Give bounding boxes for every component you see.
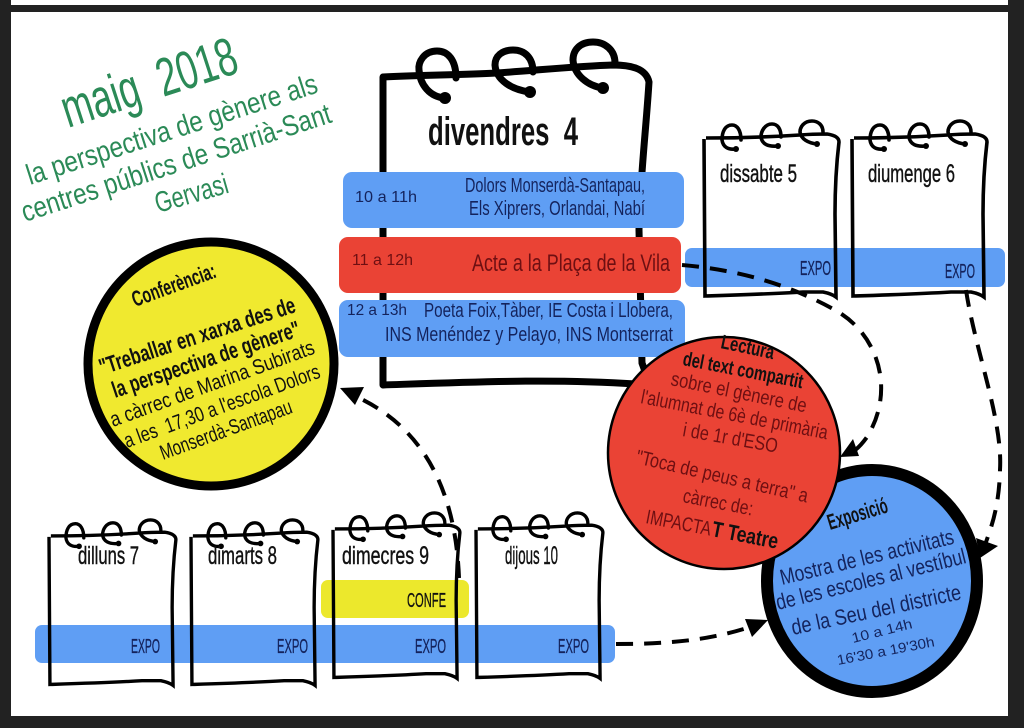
- opening hours: 10 a 14h: [850, 615, 914, 646]
- label: dilluns 7: dilluns 7: [78, 542, 139, 570]
- heading: Lectura del text compartit: [681, 331, 805, 393]
- panel: lectura circle: [608, 331, 840, 569]
- label: EXPO: EXPO: [800, 258, 831, 280]
- conference title: "Treballar en xarxa des de: [96, 292, 299, 380]
- title: maig 2018: maig 2018: [53, 26, 245, 139]
- heading: divendres 4: divendres 4: [428, 110, 578, 154]
- panel: conference circle: [88, 242, 334, 486]
- schedule row 12 a 13h: INS Menéndez y Pelayo, INS Montserrat: [385, 324, 673, 346]
- label: dijous 10: dijous 10: [505, 542, 558, 570]
- label: CONFE: CONFE: [407, 590, 446, 612]
- play credit: T Teatre: [710, 516, 781, 554]
- heading: Lectura del text compartit: Lectura: [719, 331, 777, 364]
- conference details: a les 17,30 a l'escola Dolors: [121, 360, 323, 453]
- conference bar: [321, 580, 469, 618]
- opening hours: 16'30 a 19'30h: [836, 633, 936, 668]
- schedule row 10 a 11h: Dolors Monserdà-Santapau,: [465, 175, 645, 197]
- play credit: "Toca de peus a terra" a: [634, 446, 811, 508]
- label: EXPO: EXPO: [945, 261, 975, 283]
- conference title: [96, 292, 303, 403]
- schedule row 12 a 13h: [339, 300, 685, 357]
- heading: Conferència: Conferència:: [128, 258, 219, 312]
- label: dimecres 9: dimecres 9: [342, 542, 429, 570]
- exposició description: de la Seu del districte: [789, 579, 963, 640]
- schedule row 11 a 12h: 11 a 12h: [352, 252, 413, 269]
- label: EXPO: EXPO: [558, 636, 589, 658]
- subtitle line 2: centres públics de Sarrià-Sant: [17, 98, 335, 229]
- schedule row 12 a 13h: 12 a 13h: [347, 302, 407, 319]
- panel: exposició circle: [767, 470, 977, 692]
- conference details: a càrrec de Marina Subirats: [107, 336, 318, 432]
- lectura description: l'alumnat de 6è de primària: [639, 386, 830, 444]
- schedule row 10 a 11h: [343, 172, 684, 228]
- notebook: dimarts 8: [191, 520, 318, 685]
- title block: [17, 26, 335, 229]
- panel: divendres 4 notebook: [383, 42, 650, 385]
- heading: Exposició: Exposició: [824, 493, 891, 535]
- label: EXPO: EXPO: [131, 636, 160, 658]
- notebook: dimecres 9: [333, 513, 460, 678]
- play credit: càrrec de:: [681, 485, 755, 520]
- lectura description: i de 1r d'ESO: [681, 419, 779, 458]
- notebook: dissabte 5: [704, 121, 839, 297]
- play credit: [634, 446, 811, 554]
- exposició description: de les escoles al vestíbul: [773, 543, 968, 615]
- expo band: weekend: [685, 248, 1005, 287]
- expo band: weekdays: [35, 625, 615, 663]
- label: EXPO: EXPO: [415, 636, 446, 658]
- arrow: weekday expo to exposició circle: [616, 619, 768, 644]
- conference details: Monserdà-Santapau: [157, 396, 295, 465]
- lectura description: [639, 368, 830, 458]
- arrow: red row to lectura circle: [682, 265, 881, 457]
- label: dimarts 8: dimarts 8: [208, 542, 277, 570]
- label: dissabte 5: dissabte 5: [720, 160, 797, 188]
- schedule row 10 a 11h: Els Xiprers, Orlandai, Nabí: [469, 198, 645, 220]
- heading: Lectura del text compartit: del text compartit: [681, 348, 805, 393]
- notebook: diumenge 6: [852, 121, 987, 297]
- subtitle line 1: la perspectiva de gènere als: [22, 68, 322, 192]
- conference title: la perspectiva de gènere": [108, 316, 303, 403]
- exposició description: Mostra de les activitats: [777, 524, 956, 590]
- arrow: weekend expo to exposició circle: [966, 290, 1000, 558]
- opening hours: [836, 615, 936, 668]
- exposició description: [773, 524, 968, 640]
- label: EXPO: EXPO: [277, 636, 308, 658]
- schedule row 10 a 11h: 10 a 11h: [355, 189, 417, 206]
- arrow: dimecres to conference circle: [340, 387, 459, 578]
- play credit: IMPACTA: [644, 506, 714, 541]
- schedule row 11 a 12h: Acte a la Plaça de la Vila: [472, 250, 670, 277]
- notebook: dijous 10: [476, 513, 603, 678]
- schedule row 12 a 13h: Poeta Foix,Tàber, IE Costa i Llobera,: [424, 300, 673, 322]
- schedule row 11 a 12h: [339, 237, 681, 293]
- lectura description: sobre el gènere de: [669, 368, 809, 417]
- subtitle line 3: Gervasi: [151, 168, 232, 220]
- conference details: [107, 336, 323, 465]
- label: diumenge 6: diumenge 6: [868, 160, 955, 188]
- notebook: dilluns 7: [49, 520, 176, 685]
